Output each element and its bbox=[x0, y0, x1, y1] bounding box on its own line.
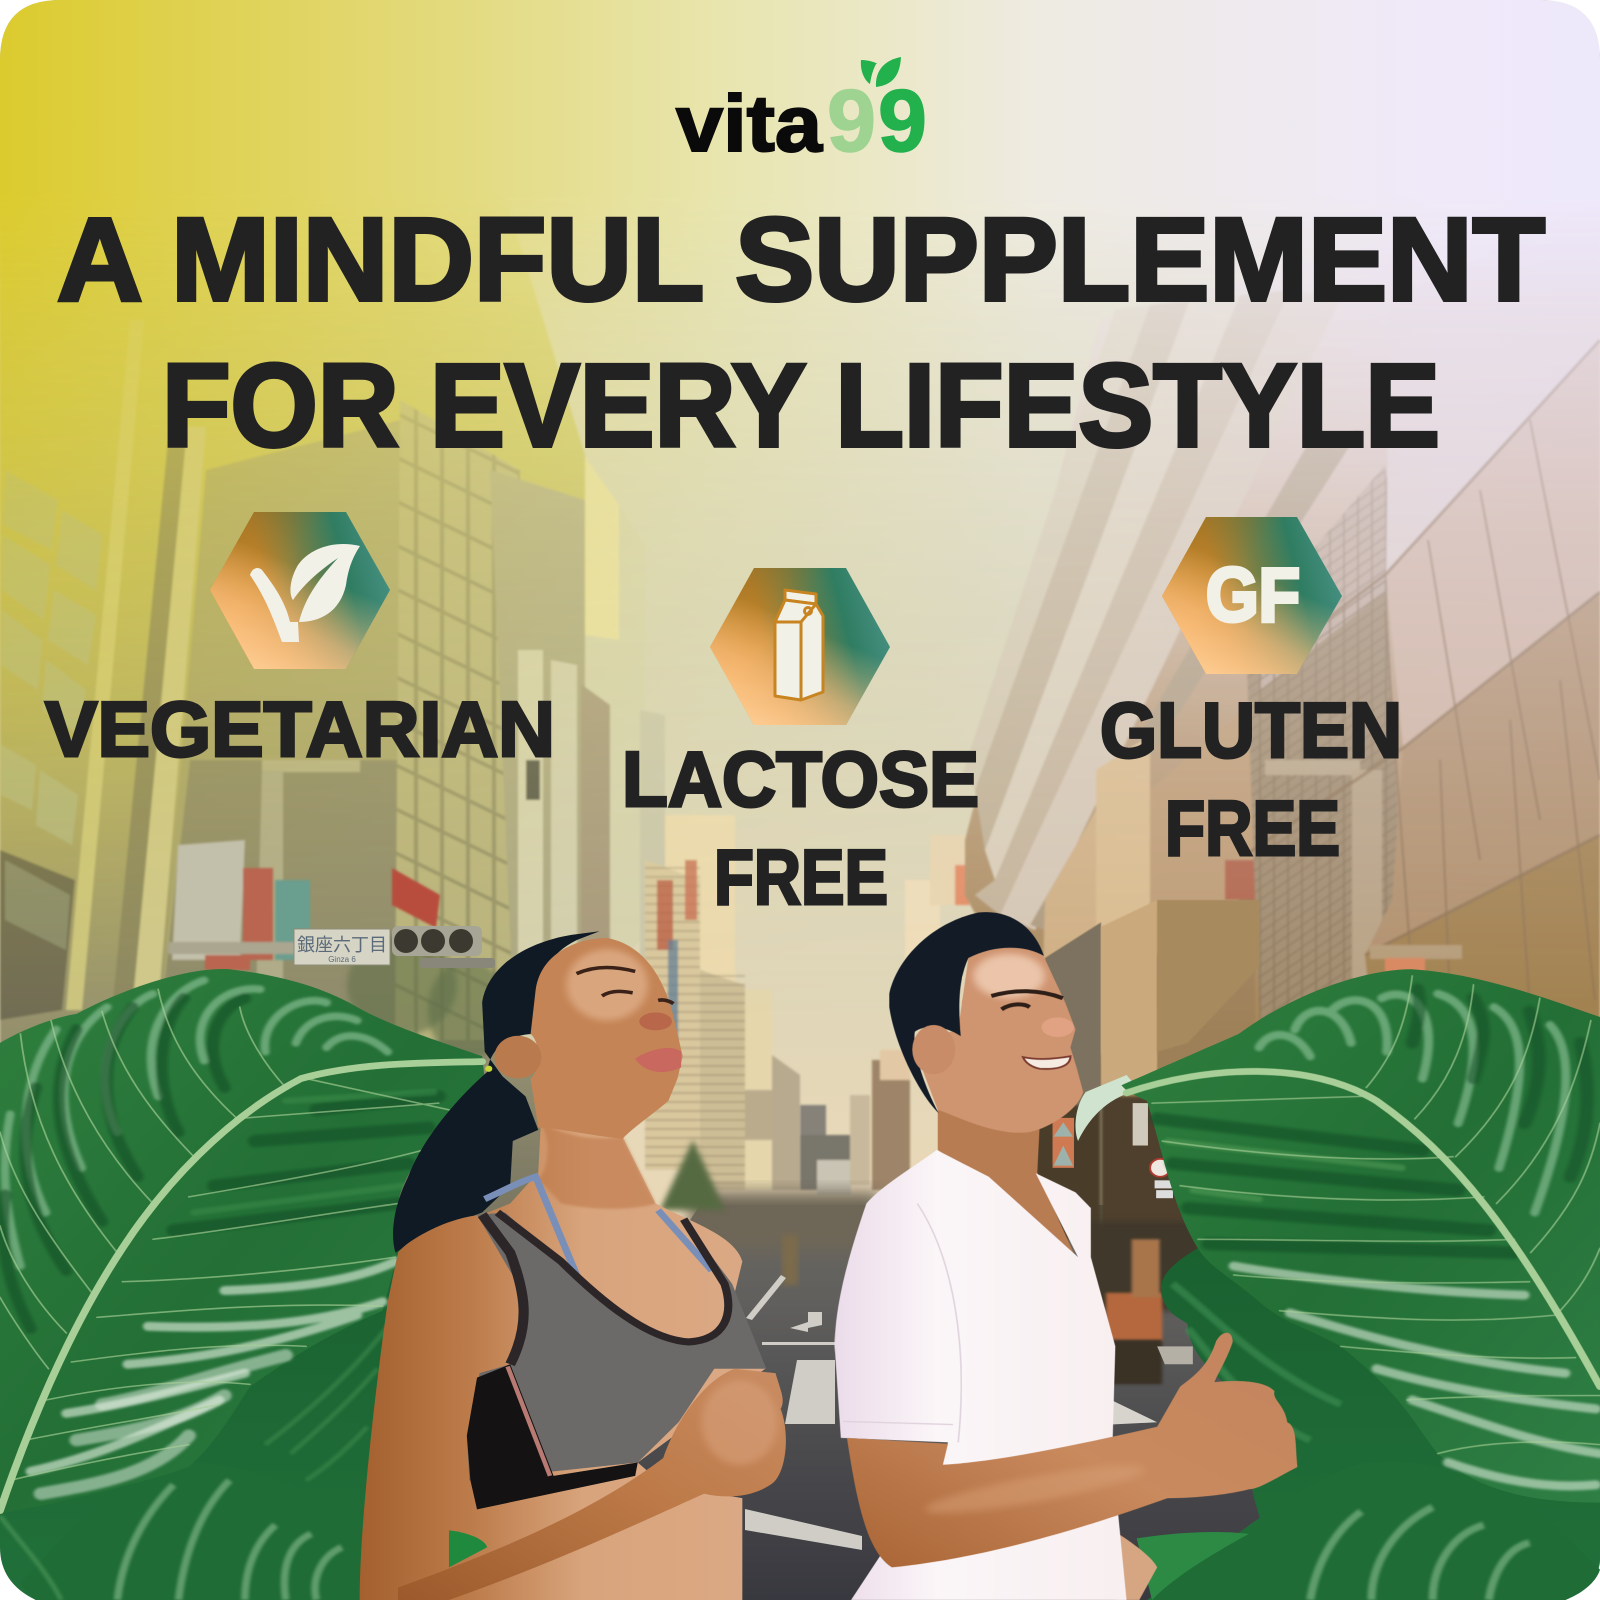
sky bbox=[0, 0, 1600, 1250]
road markings bbox=[745, 1275, 862, 1550]
line two: FREE bbox=[1165, 784, 1340, 872]
hexagon bbox=[210, 512, 390, 669]
ear bbox=[912, 1025, 955, 1074]
distant buildings at the end of the street bbox=[800, 835, 970, 1195]
top neckline trim bbox=[497, 1212, 728, 1342]
leaf veins bbox=[1127, 976, 1600, 1454]
banner signs bbox=[168, 840, 440, 970]
icon: milk carton bbox=[775, 590, 823, 700]
street name sign: Ginza 6 bbox=[328, 955, 356, 964]
right leaf bbox=[1076, 969, 1600, 1600]
shops and pedestrians behind the man bbox=[1035, 900, 1259, 1425]
hexagon bbox=[710, 568, 890, 725]
arm, shoulder and torso skin bbox=[360, 1123, 765, 1600]
leaf shading bands bbox=[3, 980, 439, 1494]
icon: leaf V bbox=[250, 544, 360, 642]
fist light bbox=[702, 1380, 778, 1465]
blurred crowd band bbox=[690, 1192, 880, 1250]
man runner bbox=[835, 912, 1297, 1600]
lower dark leaf bbox=[1137, 1248, 1600, 1600]
badge: gluten free bbox=[1100, 517, 1402, 872]
nose bbox=[1041, 1017, 1074, 1037]
upper main leaf bbox=[0, 969, 485, 1514]
bottom lobe bbox=[0, 1463, 362, 1600]
street name sign bbox=[294, 929, 390, 965]
line one: LACTOSE bbox=[622, 735, 979, 823]
logo bbox=[676, 57, 927, 170]
black side panel and band bbox=[467, 1364, 638, 1509]
label: VEGETARIAN bbox=[45, 685, 555, 773]
lower pale panels bbox=[1096, 735, 1150, 1060]
pink seam bbox=[508, 1366, 550, 1476]
arm and thumbs-up hand bbox=[847, 1333, 1297, 1567]
badge: vegetarian bbox=[45, 512, 555, 773]
head bbox=[912, 945, 1083, 1133]
leaf veins bbox=[0, 989, 482, 1511]
logo green nine: 9 bbox=[878, 71, 927, 170]
top armhole trim bbox=[482, 1215, 524, 1364]
line one: GLUTEN bbox=[1100, 686, 1402, 774]
face highlight bbox=[566, 949, 648, 1021]
left buildings bbox=[0, 180, 800, 1240]
arm highlight bbox=[922, 1457, 1147, 1522]
nose bbox=[639, 1012, 672, 1030]
blurred pedestrian bbox=[782, 1235, 798, 1285]
top gradient wash bbox=[0, 0, 1600, 974]
street trees bbox=[347, 935, 725, 1210]
smile bbox=[1023, 1056, 1070, 1069]
ponytail and hair bbox=[393, 931, 599, 1253]
title line two: FOR EVERY LIFESTYLE bbox=[162, 340, 1440, 472]
title line one: A MINDFUL SUPPLEMENT bbox=[57, 194, 1545, 326]
grey sports top bbox=[467, 1212, 766, 1480]
face bbox=[531, 938, 683, 1139]
right buildings bbox=[964, 292, 1600, 1098]
facade slats bbox=[962, 305, 1150, 790]
traffic lights bbox=[392, 926, 495, 968]
eye and brow bbox=[577, 968, 673, 1004]
green leaf peeking under the arm bbox=[449, 1530, 487, 1567]
pale pilasters bbox=[66, 320, 144, 1010]
street name sign: 銀座六丁目 bbox=[297, 935, 387, 955]
logo wordmark: vita bbox=[676, 79, 823, 168]
badge: lactose free bbox=[622, 568, 979, 921]
hair tie bbox=[485, 1066, 492, 1072]
recessed centre bbox=[164, 421, 400, 971]
hexagon bbox=[1162, 517, 1342, 674]
forearm and fist bbox=[398, 1369, 786, 1600]
neck bbox=[938, 1110, 1076, 1257]
bottom lobe bbox=[1137, 1284, 1600, 1600]
shirt folds bbox=[843, 1204, 961, 1442]
glass panes bbox=[1386, 340, 1600, 748]
label bbox=[622, 735, 979, 921]
line two: FREE bbox=[714, 833, 888, 921]
brow and eye bbox=[991, 991, 1063, 1009]
logo light nine: 9 bbox=[827, 71, 876, 170]
lower hand bbox=[1111, 1529, 1157, 1600]
white petiole bbox=[1076, 1075, 1139, 1141]
window tower bbox=[395, 400, 520, 1040]
title bbox=[57, 194, 1545, 472]
leaf shading bands bbox=[1157, 989, 1600, 1486]
left leaf bbox=[0, 969, 485, 1600]
halter straps bbox=[485, 1177, 712, 1275]
white t-shirt bbox=[835, 1150, 1127, 1600]
far left window panes bbox=[1, 470, 102, 845]
logo leaves bbox=[861, 57, 901, 87]
hair bbox=[889, 912, 1044, 1113]
upper main leaf bbox=[1121, 969, 1600, 1503]
face highlight bbox=[973, 954, 1045, 998]
road bbox=[638, 1205, 1260, 1574]
label bbox=[1100, 686, 1402, 872]
dark leaf veins bbox=[265, 1320, 393, 1480]
window grid bbox=[1247, 592, 1398, 1019]
lips bbox=[635, 1048, 681, 1072]
ear bbox=[494, 1036, 541, 1079]
icon: GF mark: GF bbox=[1206, 553, 1300, 638]
mid tan wall bbox=[1150, 801, 1253, 902]
lower dark leaf bbox=[0, 1239, 408, 1600]
woman runner bbox=[360, 931, 786, 1600]
neck shadow bbox=[536, 1123, 656, 1209]
